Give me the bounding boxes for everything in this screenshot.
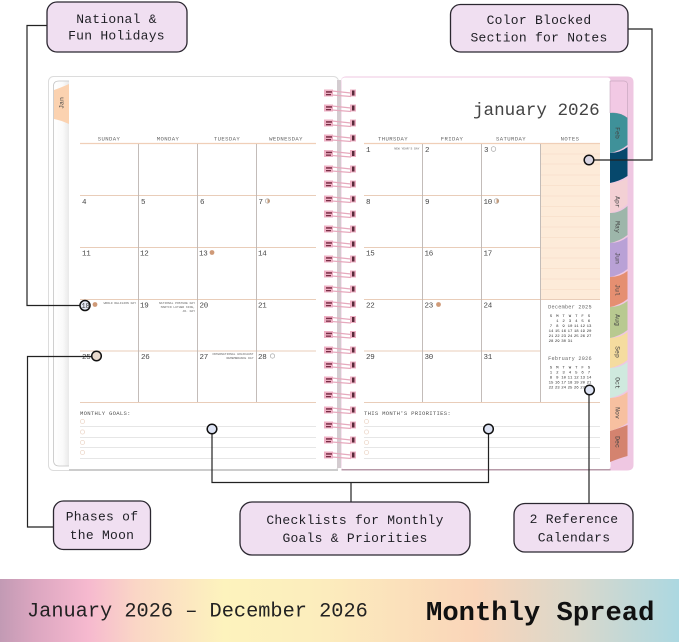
dates right: 15 (366, 250, 375, 258)
reference calendar: February 2026 (548, 356, 592, 390)
callout: 2 Reference Calendars (514, 385, 633, 552)
reference calendar: December 2025: 15 (555, 330, 560, 334)
dates left: 25 (82, 354, 91, 362)
reference calendar: December 2025: 30 (561, 340, 567, 344)
tab: Apr: Apr (614, 196, 621, 208)
callout: 2 Reference Calendars: 2 Reference (530, 512, 618, 527)
dates left: 26 (141, 354, 150, 362)
reference calendar: February 2026: T (562, 366, 565, 370)
reference calendar: February 2026: 16 (555, 382, 560, 386)
reference calendar: December 2025: 12 (580, 325, 586, 329)
footer band (0, 579, 679, 642)
reference calendar: February 2026: S (550, 366, 553, 370)
tab: Feb: Feb (614, 127, 621, 139)
callout: Phases of the Moon (28, 351, 150, 550)
priorities checklist (364, 410, 600, 458)
holiday notes left (104, 302, 254, 360)
reference calendar: December 2025 (548, 304, 592, 344)
reference calendar: February 2026: 24 (561, 386, 567, 390)
reference calendar: February 2026: 25 (568, 386, 573, 390)
reference calendar: December 2025: F (581, 315, 584, 319)
tab: Aug (610, 301, 628, 338)
dates right: 1 (366, 147, 371, 155)
reference calendar: February 2026: 26 (574, 386, 579, 390)
reference calendar: December 2025: 21 (549, 335, 554, 339)
reference calendar: February 2026: M (556, 366, 559, 370)
weekday headers right: NOTES (561, 136, 580, 142)
reference calendar: February 2026: 7 (588, 372, 591, 376)
reference calendar: February 2026: 15 (549, 382, 554, 386)
reference calendar: February 2026: 19 (574, 382, 579, 386)
holiday notes left: REMEMBRANCE DAY (226, 357, 254, 360)
reference calendar: February 2026: 11 (568, 376, 573, 380)
callout: Checklists for Monthly Goals & Priorities: Checklists for Monthly (266, 513, 444, 528)
reference calendar: February 2026: 9 (556, 376, 559, 380)
callout: Phases of the Moon: the Moon (70, 528, 134, 543)
dates right: 16 (424, 250, 434, 258)
reference calendar: February 2026: 4 (569, 372, 572, 376)
reference calendar: December 2025: M (556, 315, 559, 319)
calendar grid right (364, 144, 600, 402)
reference calendar: February 2026: T (575, 366, 578, 370)
weekday headers (98, 136, 303, 142)
panel: left page of planner (48, 76, 338, 471)
reference calendar: February 2026: F (581, 366, 584, 370)
reference calendar: February 2026: 1 (550, 372, 553, 376)
reference calendar: February 2026: 18 (568, 382, 573, 386)
reference calendar: December 2025: 2 (562, 320, 565, 324)
tab: Sep: Sep (614, 346, 621, 358)
month title: january 2026 (473, 101, 600, 121)
weekday headers right: SATURDAY (496, 136, 526, 142)
reference calendar: December 2025: 4 (575, 320, 578, 324)
monthly goals checklist (80, 410, 316, 458)
reference calendar: December 2025: T (562, 315, 565, 319)
page shadow (69, 469, 338, 471)
reference calendar: December 2025: 9 (562, 325, 565, 329)
reference calendar: February 2026: 28 (587, 386, 592, 390)
tab: Feb (610, 113, 628, 153)
moon phases left (93, 199, 275, 358)
reference calendar: December 2025: 29 (555, 340, 560, 344)
holiday note and moon phases right: NEW YEAR'S DAY (394, 146, 420, 150)
tab: Jun (610, 237, 628, 277)
section title: Monthly Spread (426, 598, 654, 629)
reference calendar: February 2026: S (588, 366, 591, 370)
holiday notes left: MARTIN LUTHER KING, (161, 306, 195, 309)
left page back cover strip (54, 81, 69, 466)
reference calendar: December 2025: 5 (581, 320, 584, 324)
reference calendar: December 2025: 14 (549, 330, 554, 334)
dates left (82, 199, 267, 362)
reference calendar: December 2025: December 2025 (548, 304, 592, 310)
reference calendar: February 2026: 10 (561, 376, 567, 380)
dates right: 30 (424, 354, 434, 362)
priorities checklist: THIS MONTH'S PRIORITIES: (364, 410, 451, 417)
reference calendar: December 2025: 24 (568, 335, 573, 339)
spiral binding (324, 80, 356, 468)
weekday headers right (378, 136, 580, 142)
dates left: 14 (258, 250, 267, 258)
reference calendar: December 2025: 17 (568, 330, 573, 334)
dates right: 24 (484, 302, 493, 310)
tab: Apr (610, 178, 628, 213)
tab: Jan: Jan (59, 97, 66, 109)
notes column (540, 144, 600, 299)
reference calendar: February 2026: 27 (580, 386, 586, 390)
holiday note and moon phases right (394, 146, 499, 307)
holiday notes left: INTERNATIONAL HOLOCAUST (212, 353, 254, 356)
reference calendar: February 2026: February 2026 (548, 356, 592, 362)
dates left: 5 (141, 199, 146, 207)
tab: May (610, 206, 628, 243)
reference calendar: February 2026: 12 (574, 376, 579, 380)
monthly goals checklist: MONTHLY GOALS: (80, 410, 131, 417)
callout: National & Fun Holidays (27, 2, 187, 311)
tab: Mar (610, 147, 628, 183)
reference calendar: December 2025: S (550, 315, 553, 319)
dates left: 4 (82, 199, 87, 207)
reference calendar: February 2026: 20 (580, 382, 586, 386)
weekday headers right: FRIDAY (441, 136, 464, 142)
callout: Color Blocked Section for Notes: Section for Notes (470, 30, 608, 46)
weekday headers: TUESDAY (214, 136, 240, 142)
reference calendar: December 2025: 8 (556, 325, 559, 329)
dates left: 12 (140, 250, 149, 258)
holiday notes left: NATIONAL POSTURE DAY (159, 302, 195, 305)
tab: top cover (610, 81, 628, 118)
reference calendar: February 2026: 6 (581, 372, 584, 376)
reference calendar: December 2025: 13 (587, 325, 592, 329)
weekday headers right: THURSDAY (378, 136, 408, 142)
reference calendar: February 2026: 8 (550, 376, 553, 380)
tab: Jan (54, 84, 69, 124)
reference calendar: December 2025: 27 (587, 335, 592, 339)
reference calendar: December 2025: 23 (561, 335, 567, 339)
reference calendar: December 2025: S (588, 315, 591, 319)
reference calendar: December 2025: 18 (574, 330, 579, 334)
dates left: 27 (200, 354, 208, 362)
callout: Color Blocked Section for Notes: Color Blocked (487, 13, 591, 28)
tab: Sep (610, 332, 628, 368)
reference calendar: December 2025: W (569, 315, 572, 319)
reference calendar: February 2026: 17 (561, 382, 567, 386)
reference calendar: February 2026: W (569, 366, 572, 370)
reference calendar: February 2026: 21 (587, 382, 592, 386)
holiday notes left: JR. DAY (182, 310, 195, 313)
weekday headers: WEDNESDAY (269, 136, 303, 142)
reference calendar: December 2025: 20 (587, 330, 592, 334)
reference calendar: February 2026: 23 (555, 386, 560, 390)
reference calendar: December 2025: 11 (574, 325, 579, 329)
panel: right page of planner (341, 76, 634, 470)
dates right: 22 (366, 302, 375, 310)
dates left: 19 (140, 302, 149, 310)
tab: Oct (610, 362, 628, 398)
reference calendar: February 2026: 5 (575, 372, 578, 376)
reference calendar: February 2026: 14 (587, 376, 592, 380)
callout: 2 Reference Calendars: Calendars (538, 530, 610, 546)
tab: Aug: Aug (614, 314, 621, 326)
reference calendar: December 2025: 26 (580, 335, 586, 339)
reference calendar: December 2025: 3 (569, 320, 572, 324)
reference calendar: December 2025: T (575, 315, 578, 319)
dates right: 2 (425, 147, 429, 155)
reference calendar: December 2025: 10 (568, 325, 573, 329)
callout: Color Blocked Section for Notes (450, 4, 652, 165)
dates left: 6 (200, 199, 205, 207)
dates right: 8 (366, 199, 370, 207)
dates right: 3 (484, 147, 489, 155)
dates left: 13 (199, 250, 208, 258)
reference calendar: February 2026: 22 (549, 386, 554, 390)
tab: Dec: Dec (614, 436, 621, 448)
dates left: 11 (82, 250, 91, 258)
reference calendar: December 2025: 7 (550, 325, 553, 329)
tab column (610, 81, 628, 462)
dates right: 31 (484, 354, 493, 362)
holiday notes left: WORLD RELIGION DAY (104, 302, 136, 305)
dates right (366, 147, 493, 362)
reference calendar: December 2025: 31 (568, 340, 573, 344)
tab: Jul (610, 271, 628, 307)
reference calendar: December 2025: 19 (580, 330, 586, 334)
tab: May: May (614, 221, 621, 233)
weekday headers: SUNDAY (98, 136, 121, 142)
reference calendar: February 2026: 13 (580, 376, 586, 380)
dates right: 10 (484, 199, 493, 207)
callout: National & Fun Holidays: Fun Holidays (68, 28, 165, 44)
dates left: 20 (200, 302, 209, 310)
dates right: 29 (366, 354, 375, 362)
reference calendar: December 2025: 16 (561, 330, 567, 334)
callout: Checklists for Monthly Goals & Priorities (207, 424, 493, 555)
reference calendar: December 2025: 25 (574, 335, 579, 339)
dates left: 21 (258, 302, 267, 310)
dates left: 28 (258, 354, 267, 362)
tab: Nov (610, 392, 628, 431)
dates left: 7 (258, 199, 263, 207)
weekday headers: MONDAY (157, 136, 180, 142)
dates right: 23 (424, 302, 434, 310)
reference calendar: December 2025: 6 (588, 320, 591, 324)
reference calendar: December 2025: 22 (555, 335, 560, 339)
reference calendar: February 2026: 2 (556, 372, 559, 376)
date range: January 2026 – December 2026 (27, 600, 368, 624)
tab: Jun: Jun (614, 252, 621, 264)
reference calendar: February 2026: 3 (562, 372, 565, 376)
callout: National & Fun Holidays: 18 (82, 303, 90, 311)
tab: Jul: Jul (614, 284, 621, 296)
callout: Phases of the Moon: Phases of (66, 510, 138, 524)
reference calendar: December 2025: 1 (556, 320, 559, 324)
callout: National & Fun Holidays: National & (76, 12, 157, 27)
reference calendar: December 2025: 28 (549, 340, 554, 344)
tab: Nov: Nov (614, 407, 621, 419)
tab: Dec (610, 425, 628, 462)
callout: Checklists for Monthly Goals & Priorities: Goals & Priorities (282, 531, 428, 546)
dates right: 9 (425, 199, 429, 207)
dates right: 17 (484, 250, 492, 258)
calendar grid left (80, 144, 316, 402)
tab: Oct: Oct (614, 377, 621, 389)
